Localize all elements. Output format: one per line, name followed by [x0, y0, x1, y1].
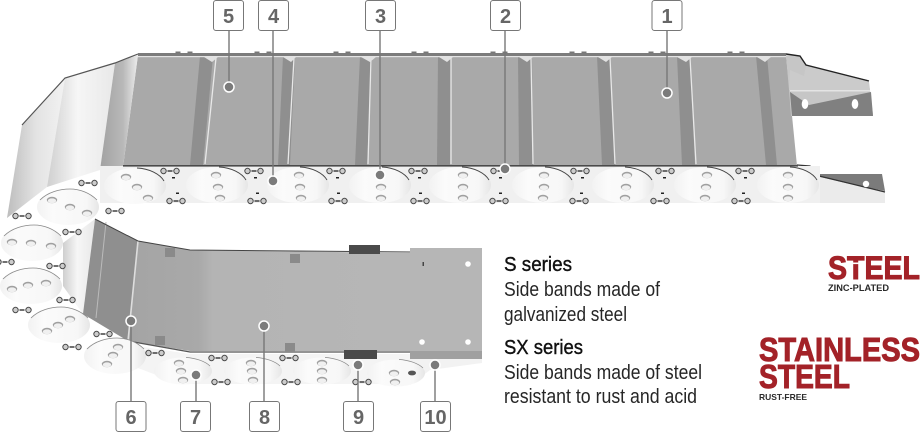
- top edge bolts: [176, 52, 744, 54]
- upper run: curved left segments: [7, 54, 138, 218]
- logo: stainless steel rust-free: [759, 331, 920, 402]
- text: SX series: resistant to rust and acid: [504, 385, 697, 408]
- small slots between disks: [172, 177, 747, 194]
- label 1: [652, 0, 682, 30]
- text: S series: galvanized steel: [504, 303, 627, 326]
- label 6: 6: [125, 407, 137, 429]
- right mounting bracket upper: [786, 54, 873, 116]
- leader lines: [131, 31, 667, 401]
- tabs and clips: [155, 245, 380, 359]
- label 5: [214, 0, 244, 30]
- side plate disks: [0, 167, 819, 386]
- label 2: [490, 0, 520, 30]
- label 1: 1: [661, 6, 673, 28]
- logo: stainless steel rust-free: RUST-FREE: [759, 392, 807, 402]
- text: S series: [504, 253, 660, 326]
- text: SX series: Side bands made of steel: [504, 361, 702, 384]
- label 8: 8: [259, 407, 270, 429]
- text: S series: S series: [504, 253, 572, 276]
- text: SX series: SX series: [504, 336, 583, 359]
- upper run: side plate strip: [100, 166, 820, 203]
- right mounting bracket lower: [790, 165, 885, 203]
- leader dots: [126, 82, 672, 380]
- label 10: 10: [424, 407, 447, 429]
- upper run: cover band: [123, 53, 797, 167]
- label 9: [344, 402, 374, 432]
- cable carrier product image: [0, 52, 885, 386]
- label 4: [258, 0, 288, 30]
- lower run: side plate strip: [130, 345, 410, 384]
- lower run: inner band: [63, 219, 410, 351]
- lower run: end plate: [410, 248, 482, 385]
- label 2: 2: [500, 6, 511, 28]
- text: S series: Side bands made of: [504, 278, 660, 301]
- label 7: [180, 402, 210, 432]
- label 3: 3: [375, 6, 386, 28]
- bolts: [0, 168, 754, 385]
- label 8: [250, 402, 280, 432]
- label 6: [116, 402, 146, 432]
- label 4: 4: [268, 6, 280, 28]
- label 7: 7: [190, 407, 201, 429]
- label 10: [420, 402, 450, 432]
- disk holes: [7, 172, 793, 385]
- logo: stainless steel rust-free: STEEL: [759, 358, 850, 395]
- logo: steel zinc-plated: ZINC-PLATED: [828, 283, 889, 294]
- text: SX series: [504, 336, 702, 408]
- label 9: 9: [353, 407, 364, 429]
- label 5: 5: [223, 6, 234, 28]
- label 3: [366, 0, 396, 30]
